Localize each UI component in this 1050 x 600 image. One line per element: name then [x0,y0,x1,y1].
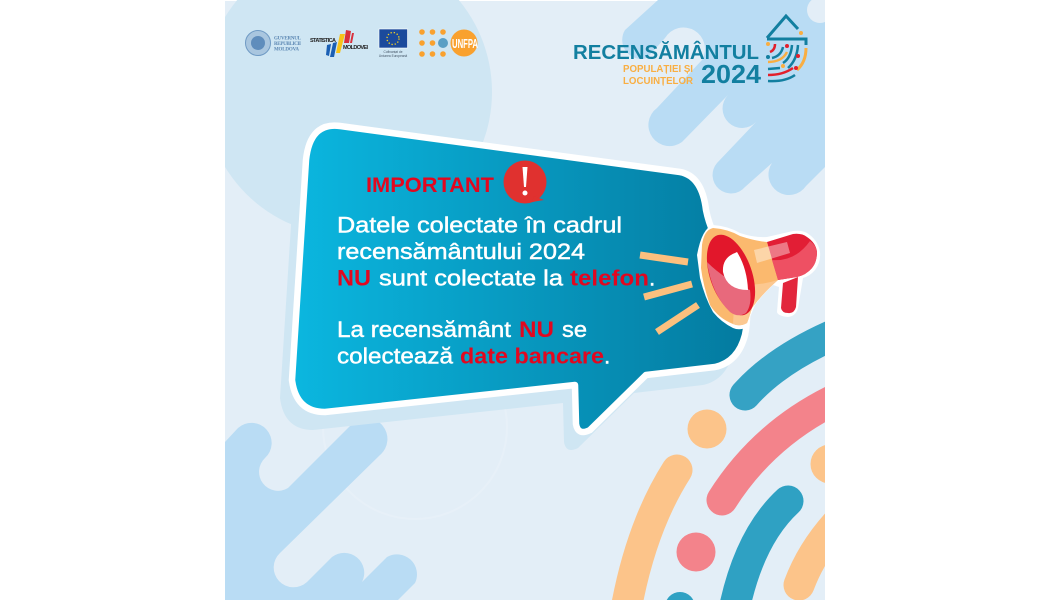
icon: exclamation bubble [504,160,546,204]
logo: Recensământul 2024 [573,16,806,89]
logo: UNDP dots [419,29,448,57]
megaphone opening [723,252,748,290]
decorative dot: peach right [810,445,825,483]
text block: telefon message: Datele colectate în cadrul [337,212,622,238]
panel: background [204,0,850,600]
text block: date bancare message: NU [519,317,554,342]
light circle top right corner [807,0,825,23]
logo: UNFPA: UNFPA [452,36,478,51]
logo: Guvernul Republicii Moldova: MOLDOVA [274,48,299,52]
background circle top left [225,0,492,224]
decorative arc: peach right [799,520,840,585]
decorative dot: pink [676,532,716,572]
logo: Statistica Moldovei [310,30,368,57]
text block: date bancare message: La recensământ [337,317,512,342]
text block: telefon message: recensământului 2024 [337,239,585,264]
text block: date bancare message: . [604,344,610,368]
icon: megaphone [697,225,820,329]
logo: Statistica Moldovei: MOLDOVEI [343,45,368,51]
blue blob top right [622,0,825,195]
decorative arc: blue bottom [733,501,788,600]
logo: Recensământul 2024: POPULAȚIEI ȘI [623,64,693,75]
logo: Recensământul 2024: RECENSĂMÂNTUL [573,40,759,64]
speech bubble [292,126,747,432]
decorative dot: peach [688,410,726,448]
decorative dot: blue bottom [665,592,695,600]
text block: date bancare message [337,317,610,368]
megaphone rear [767,234,817,280]
logo: Statistica Moldovei: STATISTICA [310,38,336,44]
logo: UNFPA [450,30,478,56]
logo: Guvernul Republicii Moldova: REPUBLICII [274,42,301,47]
speech bubble shadow [280,144,735,450]
text block: date bancare message: se [562,317,587,342]
megaphone bell lower shade [707,262,750,315]
logo: European Union: Uniunea Europeană [379,54,407,58]
text block: date bancare message: date bancare [460,344,604,368]
sound rays [640,255,698,332]
decorative arc: dark blue top [745,332,840,395]
text block: date bancare message: colectează [337,344,454,368]
megaphone bell [697,228,765,322]
logo: European Union: Cofinanțat de [384,50,403,54]
decorative arc: pink [722,397,840,500]
text block: telefon message [337,212,655,290]
heading: IMPORTANT: IMPORTANT [366,174,494,197]
logo: Recensământul 2024: LOCUINȚELOR [623,76,694,87]
text block: telefon message: . [649,266,655,290]
megaphone highlight [754,242,790,263]
megaphone rear lower shade [772,241,817,280]
text block: telefon message: NU [337,266,371,290]
text block: telefon message: sunt colectate la [379,266,564,290]
logo icon: house with fingerprint [767,16,806,81]
megaphone handle [781,277,798,313]
logo: Guvernul Republicii Moldova [246,30,302,56]
megaphone cone [701,228,778,325]
blue blob bottom left [225,418,417,600]
logo: Recensământul 2024: 2024 [701,61,762,89]
text block: telefon message: telefon [570,266,649,290]
decorative arc: peach left [625,470,677,600]
faint circle outline lower centre [323,335,507,519]
logo: Guvernul Republicii Moldova: GUVERNUL [274,36,302,42]
megaphone cone lower tint [733,280,778,325]
logo: European Union [379,29,408,58]
